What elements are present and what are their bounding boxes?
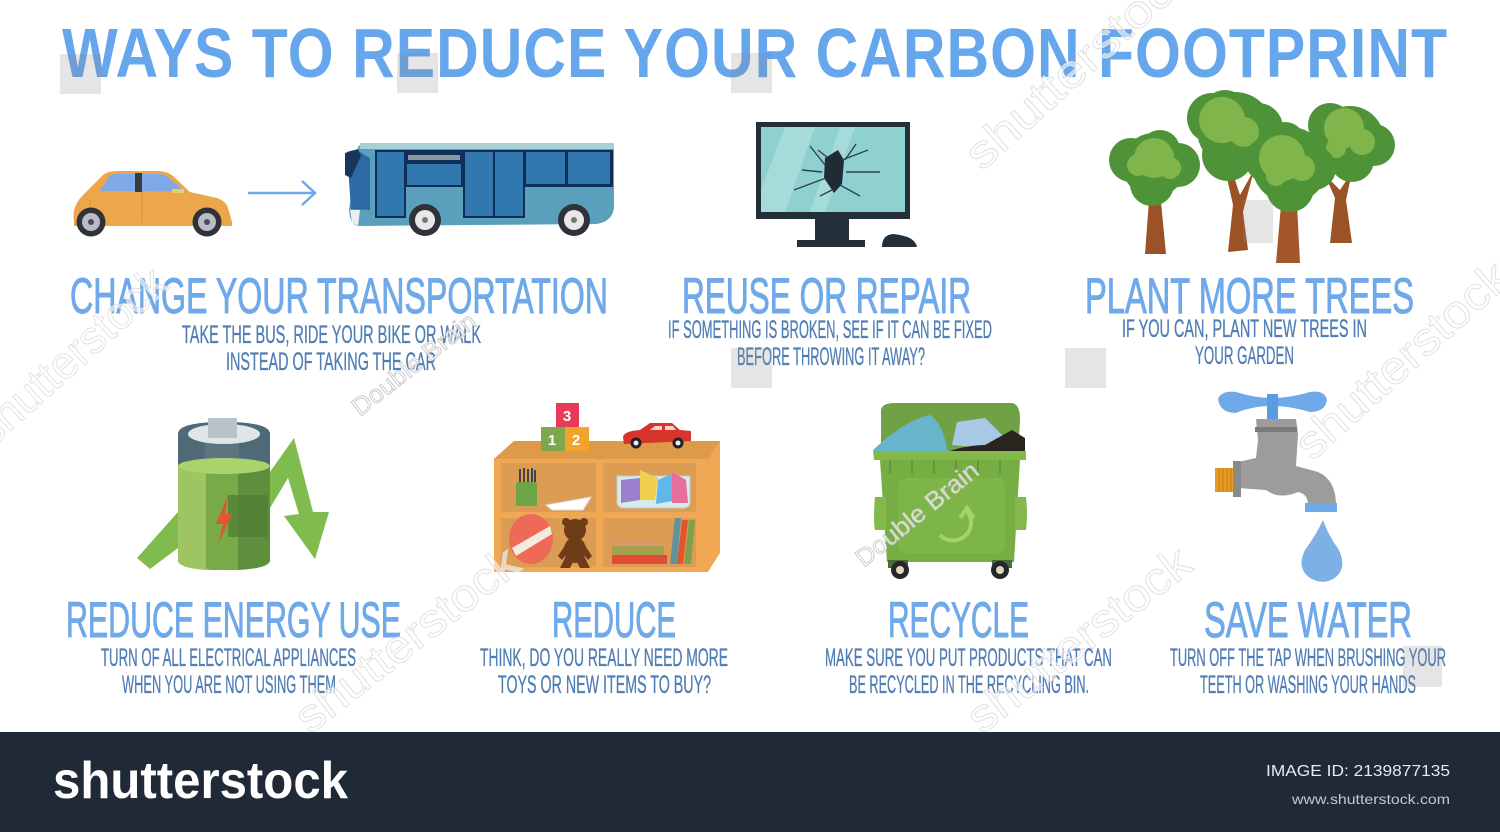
heading and text: reduce energy use: TURN OF ALL ELECTRICAL APPLIANCES [101, 644, 356, 672]
footer site url: www.shutterstock.com [1291, 791, 1450, 807]
icon: battery with green arrow [137, 418, 329, 570]
icon: water tap and drop [1215, 392, 1342, 582]
heading and text: recycle: MAKE SURE YOU PUT PRODUCTS THAT CAN [825, 644, 1112, 672]
heading and text: reuse or repair [668, 268, 992, 371]
toy blocks: 2 [572, 432, 580, 449]
heading and text: recycle [825, 592, 1112, 699]
toy car [623, 423, 691, 448]
footer image id: IMAGE ID: 2139877135 [1266, 763, 1450, 780]
heading and text: reduce: THINK, DO YOU REALLY NEED MORE [480, 644, 728, 672]
icon: trees [1109, 90, 1395, 263]
heading and text: reduce: TOYS OR NEW ITEMS TO BUY? [498, 671, 711, 699]
icon: orange car [74, 171, 232, 236]
toy blocks: 3 [563, 408, 571, 425]
icon: recycling bin [873, 403, 1027, 579]
heading and text: recycle: RECYCLE [888, 592, 1029, 648]
heading and text: reduce [480, 592, 728, 699]
heading and text: change your transportation: CHANGE YOUR TRANSPORTATION [70, 268, 608, 324]
icon: broken computer monitor [756, 122, 917, 247]
stock watermark overlays: shutterstock [1284, 249, 1500, 469]
heading and text: change your transportation [70, 268, 608, 376]
heading and text: change your transportation: INSTEAD OF TAKING THE CAR [226, 348, 436, 376]
toy blocks [541, 403, 589, 451]
footer bar [0, 732, 1500, 832]
heading and text: reduce: REDUCE [552, 592, 676, 648]
heading and text: reuse or repair: REUSE OR REPAIR [682, 268, 971, 324]
stock watermark overlays: shutterstock [956, 535, 1202, 743]
icon: blue bus [345, 143, 614, 236]
heading and text: plant more trees: YOUR GARDEN [1195, 342, 1294, 370]
heading and text: plant more trees [1085, 268, 1414, 370]
footer logo: shutterstock [53, 752, 348, 810]
icon: toy shelf [494, 403, 720, 572]
teddy bear [558, 518, 592, 568]
heading and text: save water [1170, 592, 1446, 699]
stock watermark overlays: Double Brain [346, 307, 482, 422]
heading and text: reduce energy use: REDUCE ENERGY USE [66, 592, 401, 648]
heading and text: change your transportation: TAKE THE BUS, RIDE YOUR BIKE OR WALK [182, 321, 481, 349]
toy blocks: 1 [548, 432, 556, 449]
arrow: car to bus [248, 181, 315, 205]
heading and text: reduce energy use: WHEN YOU ARE NOT USING THEM [122, 671, 336, 699]
heading and text: reuse or repair: BEFORE THROWING IT AWAY? [737, 343, 925, 371]
stock watermark overlays: shutterstock [284, 535, 530, 743]
title: WAYS TO REDUCE YOUR CARBON FOOTPRINT [62, 14, 1447, 92]
heading and text: reuse or repair: IF SOMETHING IS BROKEN, SEE IF IT CAN BE FIXED [668, 316, 992, 344]
heading and text: reduce energy use [66, 592, 401, 699]
heading and text: recycle: BE RECYCLED IN THE RECYCLING BIN. [849, 671, 1089, 699]
stock watermark overlays: Double Brain [850, 457, 984, 573]
